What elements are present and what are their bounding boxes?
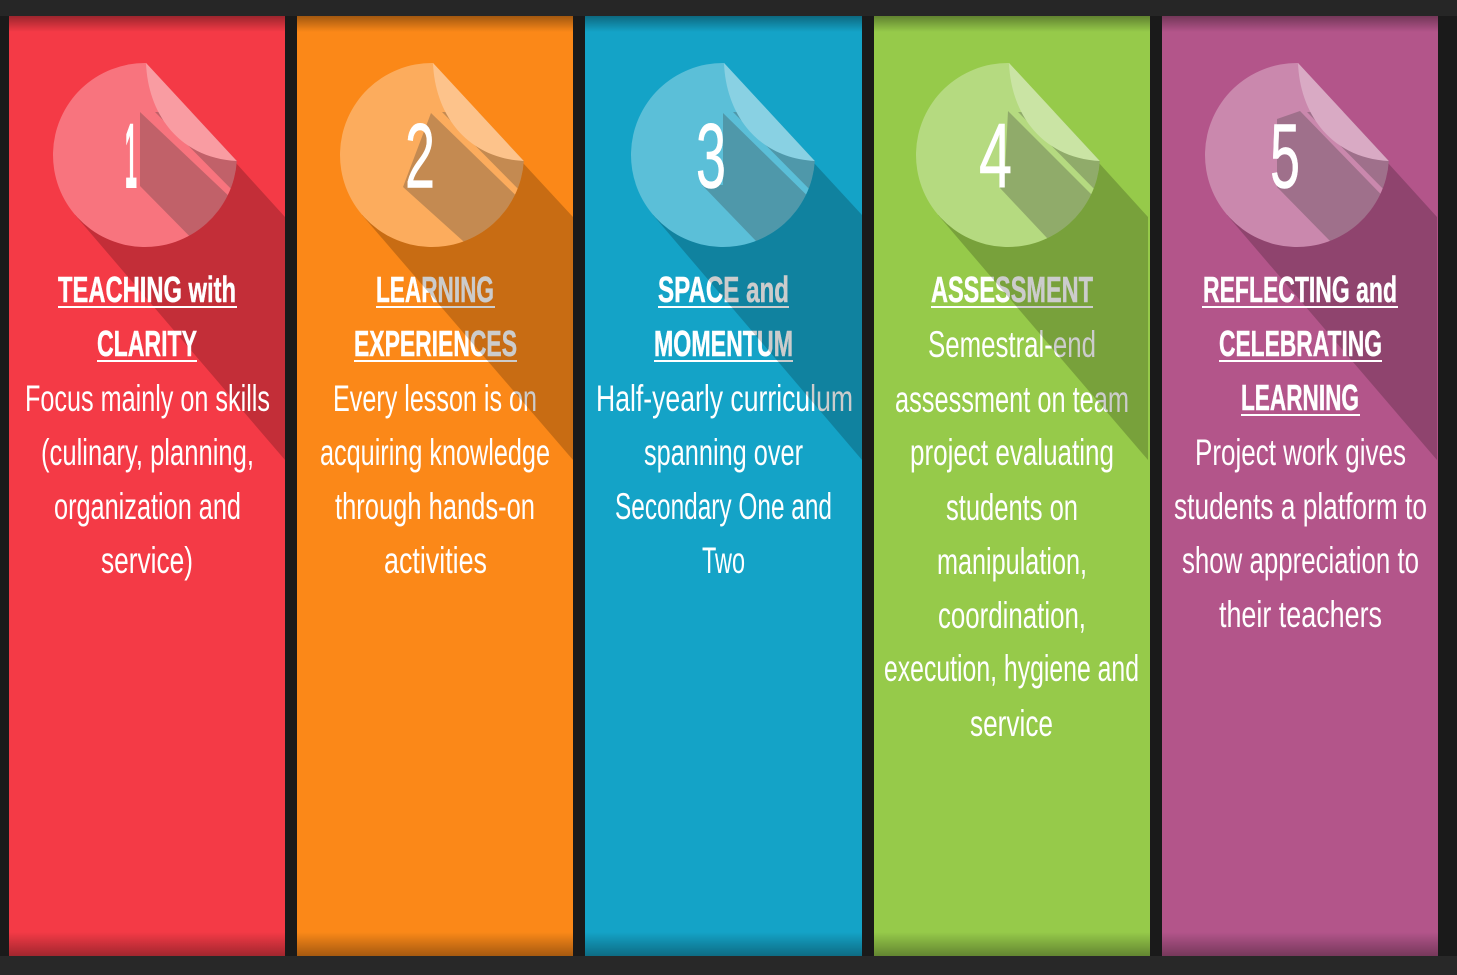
body text 2: Every lesson is on (333, 378, 537, 419)
body text 2: activities (384, 540, 487, 581)
body text 5: their teachers (1219, 594, 1382, 635)
icon: sticker 3: 3 (696, 106, 726, 208)
heading 3: SPACE and (658, 269, 789, 310)
icon: sticker 5: 5 (1270, 106, 1300, 208)
long shadow 2 (362, 163, 573, 460)
heading 5: LEARNING (1241, 377, 1359, 418)
panel: space and momentum (585, 16, 862, 956)
body text 1: service) (101, 540, 193, 581)
panel: learning experiences (297, 16, 573, 956)
body text 4: students on (946, 487, 1078, 528)
body text 1: (culinary, planning, (41, 432, 254, 473)
heading 2 (354, 269, 517, 364)
body text 3: Secondary One and (615, 486, 832, 527)
icon: sticker 4: 4 (979, 106, 1012, 208)
panel: reflecting and celebrating learning (1162, 16, 1438, 956)
heading 4: ASSESSMENT (931, 269, 1093, 310)
body text 4: assessment on team (895, 379, 1129, 420)
heading 1 (58, 269, 237, 364)
body text 3: spanning over (644, 432, 803, 473)
long shadow 5 (1227, 163, 1437, 460)
panel: assessment (874, 16, 1150, 956)
body text 3: Two (702, 540, 745, 581)
long shadow 3 (653, 163, 862, 460)
body text 2: acquiring knowledge (320, 432, 550, 473)
heading 2: LEARNING (376, 269, 494, 310)
heading 2: EXPERIENCES (354, 323, 517, 364)
icon: sticker 4 (916, 63, 1100, 247)
body text 1: organization and (54, 486, 241, 527)
heading 1: CLARITY (97, 323, 197, 364)
heading 3 (654, 269, 793, 364)
icon: sticker 5 (1205, 63, 1389, 247)
icon: sticker 1 (53, 63, 237, 247)
body text 4 (884, 324, 1139, 744)
body text 2: through hands-on (335, 486, 535, 527)
icon: sticker 2 (340, 63, 524, 247)
heading 5 (1202, 269, 1398, 418)
body text 4: service (970, 703, 1053, 744)
body text 4: manipulation, (937, 541, 1087, 582)
body text 2 (320, 378, 550, 581)
heading 1: TEACHING with (58, 269, 236, 310)
body text 3 (596, 378, 853, 581)
icon: sticker 1: 1 (125, 106, 137, 208)
panel: teaching with clarity (9, 16, 285, 956)
long shadow 1 (75, 163, 285, 460)
body text 4: Semestral-end (928, 324, 1096, 365)
body text 1: Focus mainly on skills (25, 378, 270, 419)
body text 4: coordination, (938, 595, 1086, 636)
body text 3: Half-yearly curriculum (596, 378, 853, 419)
body text 4: project evaluating (910, 432, 1114, 473)
body text 4: execution, hygiene and (884, 648, 1139, 689)
body text 1 (25, 378, 270, 581)
icon: sticker 3 (631, 63, 815, 247)
heading 3: MOMENTUM (654, 323, 793, 364)
body text 5 (1174, 432, 1427, 635)
icon: sticker 2: 2 (405, 106, 435, 208)
long shadow 4 (938, 163, 1148, 460)
